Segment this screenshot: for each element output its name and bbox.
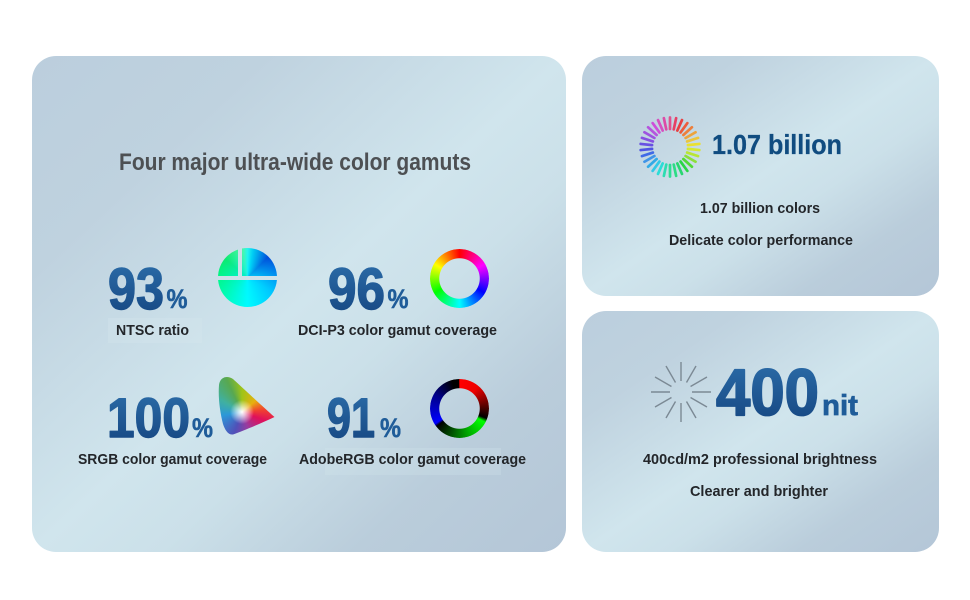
heading: 400 nit: 400 — [716, 355, 819, 429]
heading: 1.07 billion: 1.07 billion — [712, 129, 842, 160]
stat: NTSC ratio: 93 — [108, 257, 164, 322]
stat: NTSC ratio — [108, 257, 202, 343]
stat: AdobeRGB — [299, 386, 526, 475]
stat: DCI-P3 — [298, 257, 497, 339]
stat: SRGB: % — [192, 413, 213, 443]
stat: SRGB: SRGB color gamut coverage — [78, 451, 267, 468]
stat: DCI-P3: % — [388, 284, 408, 314]
panel: color gamuts — [32, 56, 566, 552]
stat: AdobeRGB: 91 — [327, 386, 375, 449]
icon: rainbow spokes — [641, 118, 699, 176]
stat: AdobeRGB: AdobeRGB color gamut coverage — [299, 451, 526, 468]
icon: AdobeRGB ring — [430, 379, 489, 438]
stat: NTSC ratio: NTSC ratio — [116, 322, 189, 339]
text: delicate color performance: Delicate color performance — [669, 232, 853, 249]
text: clearer and brighter: Clearer and brighter — [690, 483, 828, 500]
icon: DCI-P3 ring — [430, 249, 489, 308]
stat: DCI-P3: 96 — [328, 257, 385, 322]
icon: NTSC pie — [218, 248, 277, 307]
heading: 400 nit: nit — [822, 390, 858, 422]
icon: SRGB gamut triangle — [218, 377, 274, 434]
stat: SRGB: 100 — [107, 386, 190, 449]
stat: AdobeRGB: % — [380, 413, 401, 443]
stat: NTSC ratio: % — [166, 284, 188, 314]
stat: DCI-P3: DCI-P3 color gamut coverage — [298, 322, 497, 339]
icon: brightness burst — [651, 362, 711, 422]
text: professional brightness: 400cd/m2 professional brightness — [643, 451, 877, 468]
title: Four major ultra-wide color gamuts — [119, 149, 471, 176]
panel: 1.07 billion colors — [582, 56, 939, 296]
stat: SRGB — [78, 386, 267, 468]
text: 1.07 billion colors: 1.07 billion colors — [700, 200, 820, 217]
panel: 400 nit brightness — [582, 311, 939, 552]
